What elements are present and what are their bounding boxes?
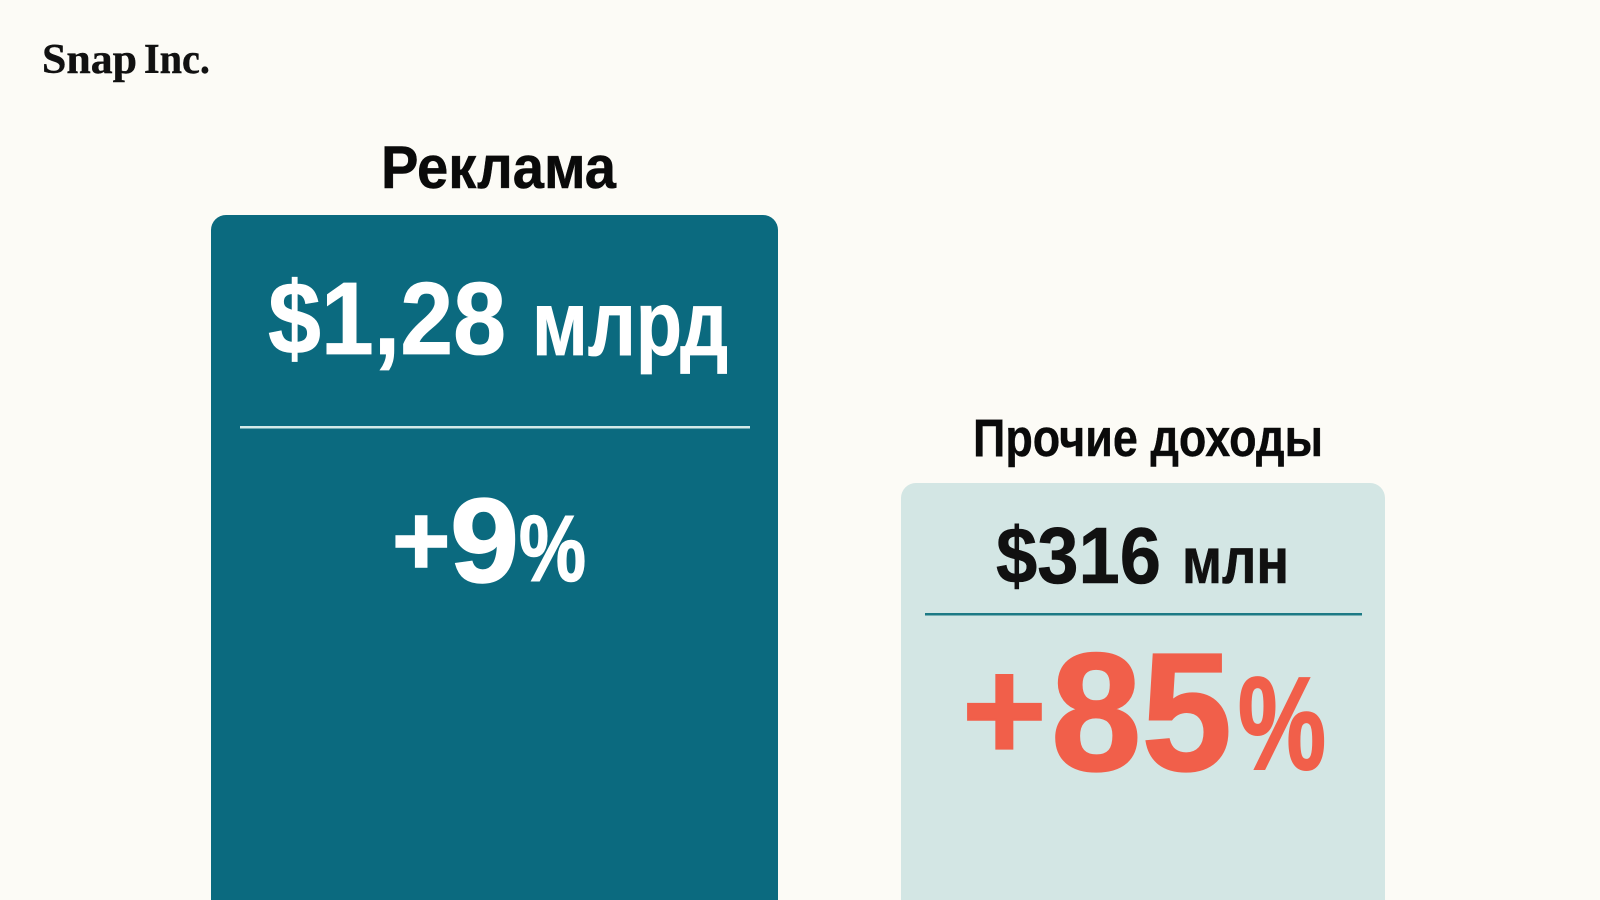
advertising growth: 9 bbox=[450, 474, 519, 608]
logo: Snap Inc. bbox=[42, 37, 210, 83]
other revenue growth: 85 bbox=[1051, 618, 1232, 806]
other revenue value: $316 bbox=[996, 511, 1161, 600]
heading: advertising: Реклама bbox=[381, 134, 617, 201]
advertising growth: % bbox=[519, 496, 586, 601]
logo: Snap Inc.: Snap bbox=[42, 37, 137, 83]
other revenue growth: + bbox=[962, 629, 1047, 791]
heading: other revenue: Прочие доходы bbox=[973, 409, 1323, 468]
logo: Snap Inc.: Inc. bbox=[144, 37, 210, 83]
other revenue value: млн bbox=[1182, 524, 1289, 597]
advertising revenue value bbox=[268, 261, 728, 376]
advertising revenue value: млрд bbox=[532, 273, 728, 375]
advertising revenue value: $1,28 bbox=[268, 261, 506, 376]
panel: advertising bbox=[211, 215, 778, 900]
panel: other revenue bbox=[901, 483, 1385, 900]
advertising growth bbox=[392, 474, 586, 608]
other revenue value bbox=[996, 511, 1289, 600]
advertising growth: + bbox=[392, 485, 450, 597]
other revenue growth: % bbox=[1238, 650, 1326, 797]
other revenue growth bbox=[962, 618, 1326, 806]
